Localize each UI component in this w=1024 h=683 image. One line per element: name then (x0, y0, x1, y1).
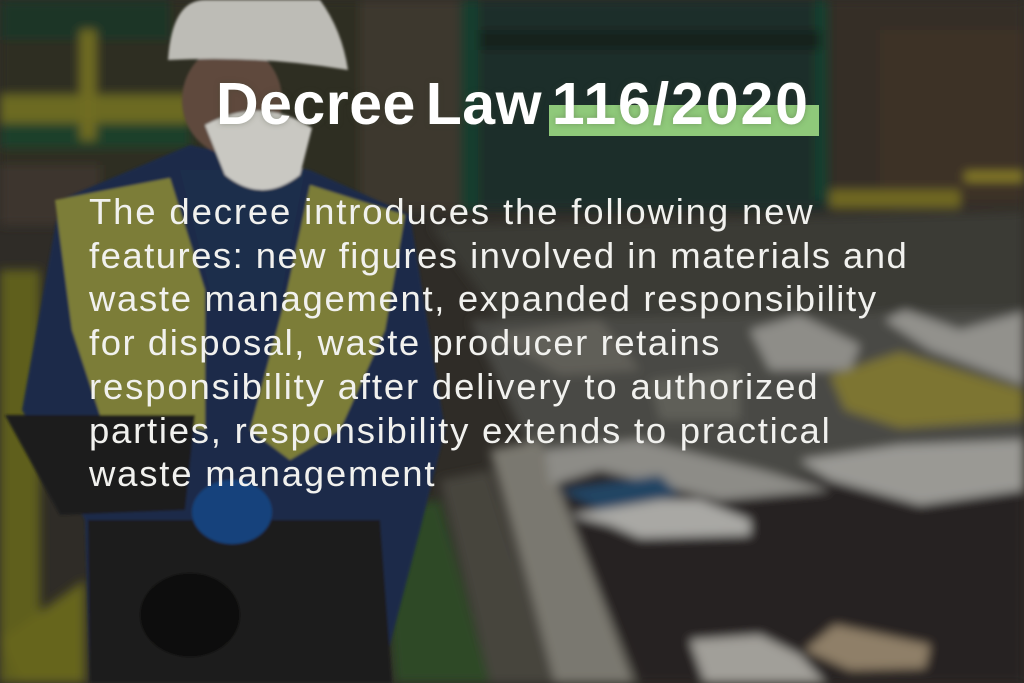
body text (89, 191, 908, 494)
body text: parties, responsibility extends to practical (89, 410, 831, 451)
body text: The decree introduces the following new (89, 191, 814, 232)
title (216, 71, 819, 137)
worker (5, 0, 445, 683)
body text: features: new figures involved in materials and (89, 235, 908, 276)
body text: responsibility after delivery to authorized (89, 366, 819, 407)
body text: for disposal, waste producer retains (89, 322, 721, 363)
title highlight bar (549, 105, 819, 136)
body text: waste management, expanded responsibility (89, 278, 878, 319)
title text: Decree Law 116/2020 (216, 71, 810, 137)
body text: waste management (89, 453, 436, 494)
